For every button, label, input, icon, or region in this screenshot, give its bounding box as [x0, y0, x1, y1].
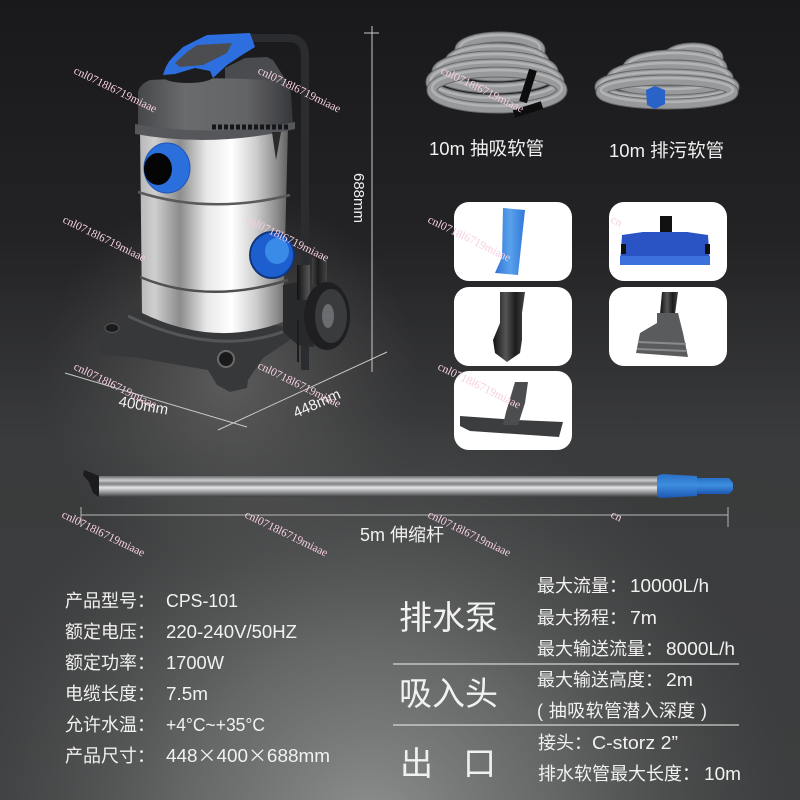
spec list [65, 591, 330, 768]
icon: wheel [304, 282, 350, 350]
watermarks [60, 65, 624, 559]
watermarks: cn [609, 509, 624, 525]
watermarks: cnl0718l6719miaae [256, 65, 342, 115]
watermarks: cnl0718l6719miaae [244, 214, 330, 264]
watermarks: cnl0718l6719miaae [426, 509, 512, 559]
stainless drum [140, 128, 288, 333]
water temperature row [65, 715, 265, 735]
voltage row [65, 622, 297, 642]
left port [144, 143, 190, 193]
vacuum cleaner illustration [98, 33, 350, 392]
watermarks: cnl0718l6719miaae [72, 361, 158, 411]
watermarks: cnl0718l6719miaae [61, 214, 147, 264]
icon: suction hose coils [431, 35, 562, 108]
control panel [175, 43, 232, 67]
heading: outlet [400, 745, 496, 782]
pole dimension: 5m 伸缩杆 [360, 525, 444, 545]
model row: CPS-101 [166, 591, 238, 611]
model row: 产品型号： [65, 591, 155, 611]
latch [272, 132, 281, 160]
watermarks: cnl0718l6719miaae [426, 214, 512, 264]
watermarks: cnl0718l6719miaae [436, 361, 522, 411]
handle shadow [162, 69, 214, 83]
vents [212, 124, 288, 130]
cable row: 电缆长度： [65, 684, 155, 704]
model row [65, 591, 238, 611]
pump values: 7m [630, 608, 657, 628]
dimension: width: 400mm [117, 393, 170, 419]
power row: 1700W [166, 653, 224, 673]
accessory card: blue tube [454, 202, 572, 281]
dimension: height: 688mm [350, 173, 367, 223]
dimensions row [65, 742, 330, 768]
power row: 额定功率： [65, 653, 155, 673]
heading: outlet: 出 [400, 745, 433, 782]
lid dome [138, 78, 293, 135]
outlet values [538, 733, 741, 784]
outlet values: 10m [704, 764, 741, 784]
pump values: 最大扬程： [537, 608, 627, 628]
outlet pipes [297, 258, 327, 300]
accessory card: blue floor brush [609, 202, 727, 281]
pole blue collar [657, 474, 697, 498]
lower drum band [140, 277, 288, 292]
pump values: 8000L/h [666, 639, 735, 659]
outlet values: C-storz 2” [592, 733, 678, 753]
pole blue tip [697, 478, 733, 494]
pump values: 10000L/h [630, 576, 709, 596]
icon: pole hook [83, 470, 99, 497]
wheel centre [322, 304, 334, 328]
accessory card: floor nozzle [454, 371, 572, 450]
watermarks: cnl0718l6719miaae [60, 509, 146, 559]
left port opening [144, 153, 172, 185]
spec table [393, 576, 741, 784]
suction hose label: 10m 抽吸软管 [429, 138, 544, 159]
wheel bracket [283, 280, 314, 347]
voltage row: 额定电压： [65, 622, 155, 642]
divider [393, 664, 739, 725]
icon: handle pipe [250, 38, 305, 370]
rear foot screw [105, 324, 119, 332]
dimension: height [350, 26, 379, 372]
cable row [65, 684, 208, 704]
base [98, 307, 290, 392]
rear housing [225, 57, 287, 95]
dimension: depth [218, 352, 387, 430]
water temperature row: 允许水温： [65, 715, 155, 735]
watermarks: cnl0718l6719miaae [256, 360, 342, 410]
water temperature row: +4°C~+35°C [166, 715, 265, 735]
base foot screw [218, 351, 234, 367]
pole dimension [81, 507, 728, 545]
discharge hose label: 10m 排污软管 [609, 140, 724, 161]
suction values: 2m [666, 670, 693, 690]
suction values [537, 670, 707, 721]
suction values: 最大输送高度： [537, 670, 663, 690]
upper drum band [138, 192, 290, 204]
base inner ring [128, 316, 288, 341]
suction hose [429, 35, 562, 159]
icon: discharge hose coils [600, 46, 734, 104]
voltage row: 220-240V/50HZ [166, 622, 297, 642]
watermarks: cnl0718l6719miaae [439, 65, 525, 115]
icon: suction T-connector [514, 70, 542, 114]
power row [65, 653, 224, 673]
outlet values: 排水软管最大长度： [538, 764, 700, 784]
pump values [537, 576, 735, 659]
accessory card: black adapter [454, 287, 572, 366]
watermarks: cn [609, 214, 624, 230]
pump values: 最大流量： [537, 576, 627, 596]
dimension: width [65, 373, 247, 427]
right port [250, 232, 294, 278]
dimensions row: 448×400×688mm [166, 742, 330, 768]
dimension: depth: 448mm [291, 386, 343, 422]
pump values: 最大输送流量： [537, 639, 663, 659]
icon: blue handle [163, 33, 255, 78]
suction values: ( 抽吸软管潜入深度 ) [537, 701, 707, 721]
wheel hub [315, 289, 347, 343]
telescopic pole [83, 470, 733, 498]
watermarks: cnl0718l6719miaae [243, 509, 329, 559]
lid rim [135, 122, 295, 140]
cable row: 7.5m [166, 684, 208, 704]
pole tube [99, 476, 659, 497]
heading: outlet: 口 [463, 745, 496, 782]
heading: suction head: 吸入头 [399, 675, 498, 712]
accessory card: grey nozzle [609, 287, 727, 366]
wire [297, 320, 299, 362]
watermarks: cnl0718l6719miaae [72, 65, 158, 115]
discharge hose [600, 46, 734, 161]
heading: pump: 排水泵 [399, 599, 498, 636]
right port cap [265, 238, 289, 264]
icon: blue connector [646, 86, 665, 109]
dimensions row: 产品尺寸： [65, 746, 155, 766]
outlet values: 接头： [538, 733, 592, 753]
